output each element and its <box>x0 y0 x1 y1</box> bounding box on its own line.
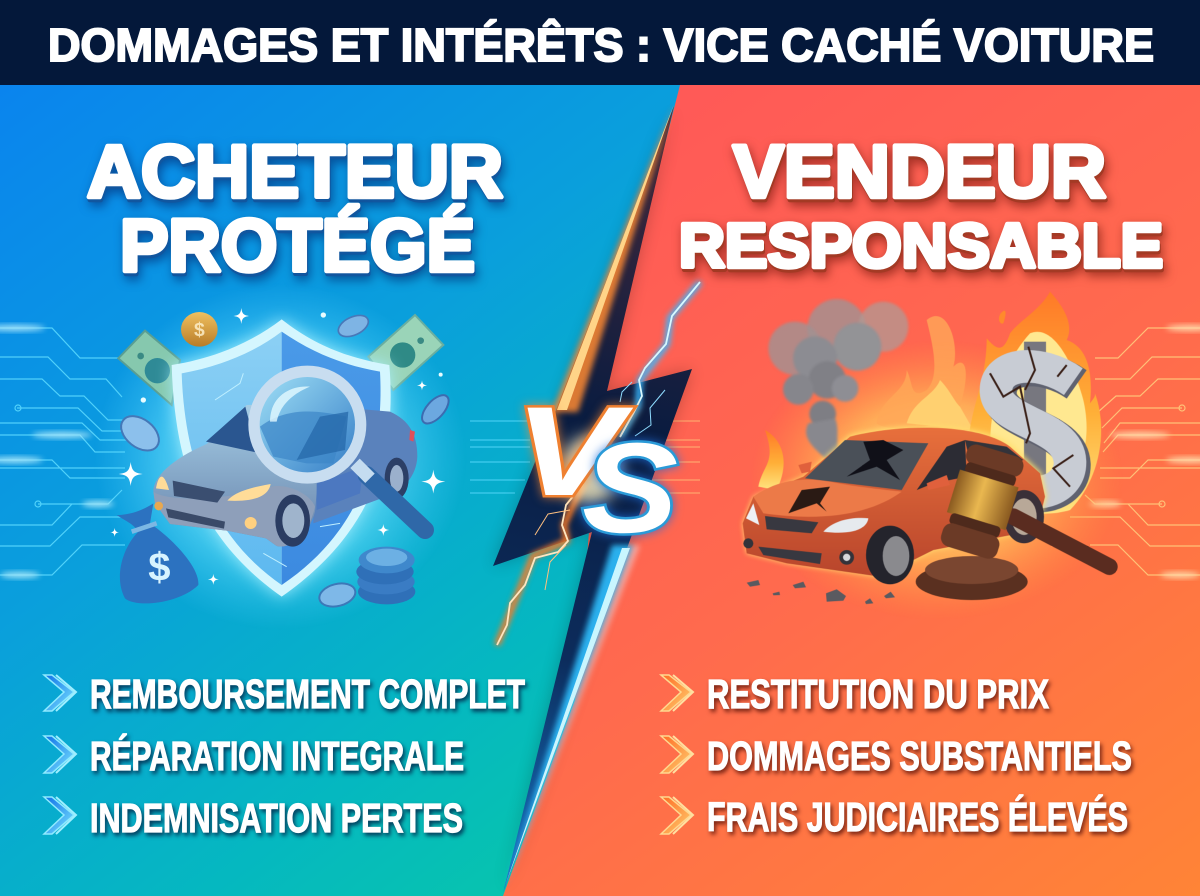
icon: coins: $ <box>194 320 205 341</box>
icon: sparkles <box>110 308 445 585</box>
heading: acheteur protégé: PROTÉGÉ <box>120 204 475 287</box>
VS badge <box>514 380 678 560</box>
heading: acheteur protégé <box>87 130 503 287</box>
bullet list: seller: RESTITUTION DU PRIX <box>707 671 1049 717</box>
heading: vendeur responsable <box>679 130 1163 281</box>
icon: chevron <box>44 675 76 711</box>
icon: gavel <box>916 442 1109 600</box>
icon: background flames <box>758 292 1101 514</box>
lightning bolt divider <box>493 104 692 893</box>
heading: vendeur responsable: VENDEUR <box>733 130 1106 213</box>
icon: wrecked car <box>743 426 1047 584</box>
left circuit lines <box>0 325 535 578</box>
VS badge: S <box>582 417 678 560</box>
bullet list: buyer <box>44 671 525 841</box>
VS badge: V <box>514 380 634 522</box>
icon: smoke <box>768 299 908 488</box>
illustration: protected car <box>93 283 467 630</box>
icon: shield <box>172 319 391 597</box>
icon: cracked dollar sign <box>990 342 1077 503</box>
icon: chevron <box>44 797 76 834</box>
icon: car <box>153 403 417 547</box>
heading: acheteur protégé: ACHETEUR <box>87 130 503 213</box>
icon: money bag: $ <box>148 546 170 590</box>
icon: magnifying glass <box>254 371 425 530</box>
header bar <box>0 0 1200 85</box>
bullet list: buyer: INDEMNISATION PERTES <box>90 795 463 841</box>
icon: rubble <box>747 580 895 604</box>
orange lightning spark <box>497 484 583 645</box>
left blue background panel <box>0 85 700 896</box>
icon: coins <box>115 311 453 610</box>
title: DOMMAGES ET INTÉRÊTS : VICE CACHÉ VOITURE <box>48 19 1154 71</box>
blue lightning spark <box>620 282 700 437</box>
right circuit lines <box>625 325 1200 578</box>
icon: chevron <box>661 675 693 711</box>
bullet list: buyer: RÉPARATION INTEGRALE <box>90 733 464 779</box>
illustration: damaged car <box>743 292 1123 620</box>
right orange background panel <box>503 85 1200 896</box>
heading: vendeur responsable: RESPONSABLE <box>679 212 1163 281</box>
icon: chevron <box>661 797 693 834</box>
icon: money bag <box>117 503 198 603</box>
icon: banknotes <box>118 315 443 405</box>
bullet list: seller <box>661 671 1132 840</box>
bullet list: buyer: REMBOURSEMENT COMPLET <box>90 671 525 717</box>
icon: chevron <box>661 736 693 773</box>
icon: chevron <box>44 736 76 773</box>
